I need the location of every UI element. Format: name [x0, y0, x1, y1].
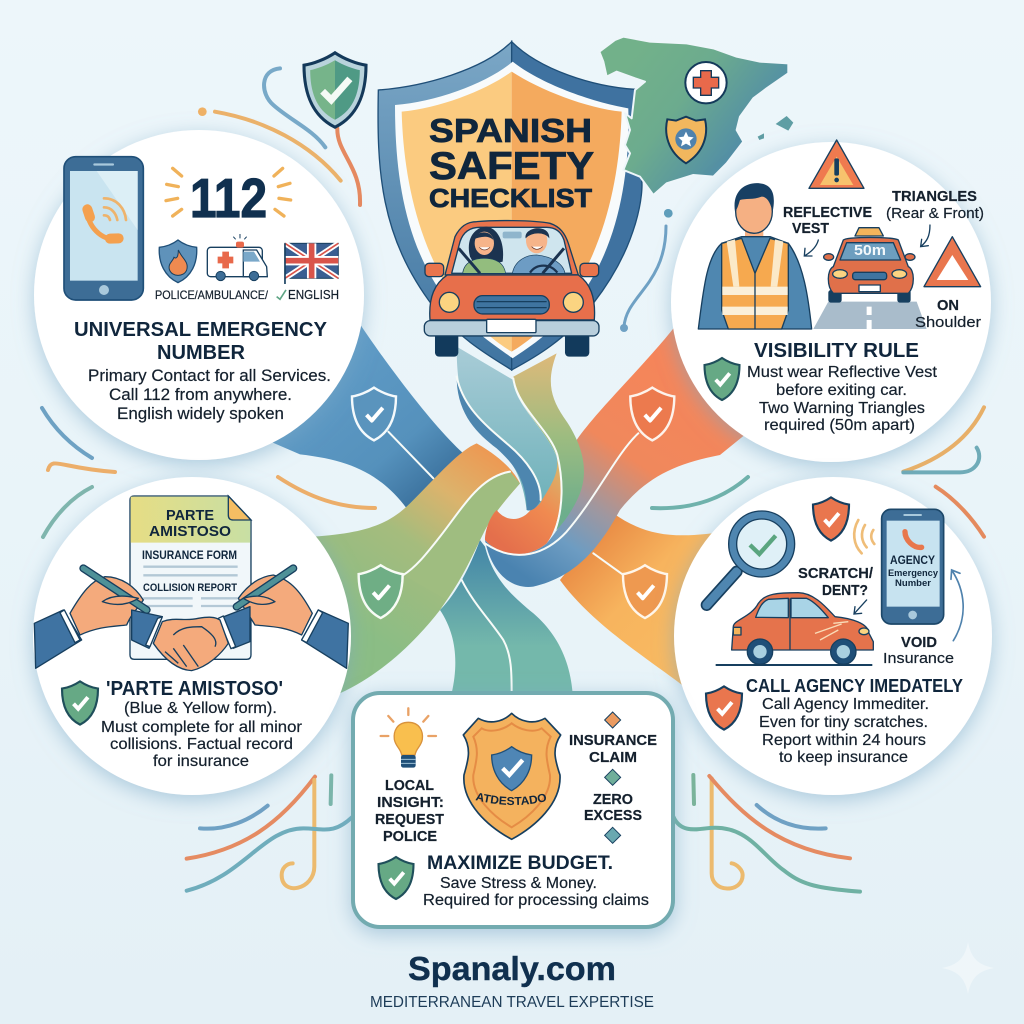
left arm — [34, 568, 147, 668]
body text: Save Stress & Money. — [440, 875, 597, 892]
body text: collisions. Factual record — [110, 736, 293, 753]
decorative swirl lines — [42, 68, 984, 892]
ribbon: green-gold from shield — [513, 353, 584, 532]
insight labels: LOCAL — [385, 778, 434, 794]
phone text: Emergency — [888, 568, 939, 579]
icon: floating green shield — [304, 53, 366, 127]
labels: SCRATCH/ — [798, 566, 873, 582]
icon: shield on orange ribbon — [630, 388, 674, 440]
central woven ribbons — [267, 317, 747, 693]
panel: maximize budget — [340, 684, 686, 944]
heading: UNIVERSAL EMERGENCY — [74, 319, 328, 341]
arrows — [804, 225, 930, 256]
heading: VISIBILITY RULE — [754, 340, 919, 362]
badge label: ATDESTADO — [476, 793, 546, 806]
body text: Call Agency Immediter. — [762, 696, 929, 713]
heading: NUMBER — [157, 342, 246, 364]
benefit labels: EXCESS — [584, 808, 642, 824]
body text — [88, 367, 331, 423]
body text: Must complete for all minor — [101, 719, 303, 736]
brand footer: MEDITERRANEAN TRAVEL EXPERTISE — [370, 994, 654, 1011]
ribbon: green to Parte Amistoso panel — [313, 443, 520, 693]
benefit labels: ZERO — [593, 792, 633, 808]
diamonds — [605, 712, 621, 843]
icon: signal waves — [854, 520, 874, 553]
title text — [429, 112, 594, 213]
icon: sparkle watermark — [942, 942, 994, 994]
labels: VEST — [792, 221, 829, 237]
ribbon: teal-blue from shield — [457, 347, 557, 511]
body text: before exiting car. — [776, 382, 907, 399]
brand footer — [370, 950, 654, 1011]
labels: VOID — [901, 634, 937, 651]
number 112: 112 — [190, 167, 267, 229]
benefit labels: INSURANCE — [569, 733, 657, 749]
body text — [423, 875, 649, 909]
phone text: AGENCY — [890, 555, 935, 567]
body text — [747, 364, 938, 434]
labels: (Rear & Front) — [886, 205, 984, 222]
phone text — [888, 555, 939, 589]
icon: shield on green ribbon — [359, 565, 403, 618]
benefit labels — [569, 733, 657, 824]
body text: Must wear Reflective Vest — [747, 364, 938, 381]
icon: light bulb — [381, 708, 436, 768]
body text: Required for processing claims — [423, 892, 649, 909]
icon: reflective triangle — [924, 237, 981, 287]
panel: universal emergency number — [34, 130, 364, 460]
heading: 'PARTE AMISTOSO' — [106, 678, 283, 700]
icon: car on road — [813, 228, 927, 329]
labels: Insurance — [883, 650, 954, 667]
icon: UK flag — [277, 243, 338, 299]
heading: MAXIMIZE BUDGET. — [427, 852, 613, 874]
icon: police badge — [666, 117, 706, 163]
body text: for insurance — [153, 753, 249, 770]
icon: scratched car — [716, 593, 873, 665]
labels: ON — [937, 297, 959, 314]
body text: to keep insurance — [779, 749, 908, 766]
insight labels — [375, 778, 444, 845]
body text: required (50m apart) — [764, 417, 915, 434]
map of Spain — [599, 37, 793, 218]
form labels: AMISTOSO — [149, 523, 231, 540]
body text — [101, 700, 303, 770]
icon: green shield — [62, 681, 98, 725]
service labels — [155, 288, 339, 302]
icon: insurance form document — [130, 496, 251, 659]
body text: (Blue & Yellow form). — [124, 700, 277, 717]
body text: Two Warning Triangles — [759, 400, 925, 417]
title text: SPANISH — [429, 112, 592, 149]
ribbon: blue to emergency panel — [267, 317, 463, 508]
icon: shield on blue ribbon — [352, 388, 396, 440]
form labels: INSURANCE FORM — [142, 550, 237, 562]
insight labels: INSIGHT: — [377, 795, 444, 811]
labels: DENT? — [822, 583, 868, 599]
ribbon: orange-blue band to visibility panel — [485, 320, 747, 587]
panel: visibility rule — [671, 140, 991, 462]
service labels: ENGLISH — [288, 288, 339, 302]
icon: magnifying glass — [707, 515, 791, 605]
labels: TRIANGLES — [892, 189, 977, 205]
body text: Even for tiny scratches. — [759, 714, 928, 731]
icon: orange shield — [813, 497, 849, 541]
icon: warning triangle — [809, 140, 864, 188]
right arm — [237, 568, 348, 668]
service labels: POLICE/AMBULANCE/ — [155, 288, 269, 302]
form labels: PARTE — [166, 507, 214, 524]
icon: atestado badge — [463, 713, 561, 839]
ribbon: orange swirl — [485, 457, 561, 554]
arrows — [854, 570, 963, 641]
icon: shield on lower orange ribbon — [623, 565, 667, 618]
shield emblem — [378, 42, 642, 370]
labels: REFLECTIVE — [783, 205, 872, 221]
icons: services — [159, 234, 267, 283]
body text: Call 112 from anywhere. — [109, 386, 292, 404]
panel: parte amistoso — [33, 477, 351, 795]
title text: CHECKLIST — [429, 183, 592, 213]
icon: green shield — [704, 358, 740, 400]
icon: green shield — [378, 857, 414, 899]
labels — [783, 189, 984, 331]
labels — [798, 566, 954, 667]
panel: call agency immediately — [674, 477, 992, 795]
ribbon: orange to Call Agency panel — [560, 513, 733, 690]
icon: phone calling — [64, 157, 143, 300]
insight labels: REQUEST — [375, 812, 444, 828]
icon: agency phone — [882, 509, 944, 624]
labels: Shoulder — [915, 314, 981, 331]
form labels: COLLISION REPORT — [143, 582, 237, 594]
title text: SAFETY — [429, 145, 594, 188]
shaking hands — [132, 607, 250, 671]
icon: orange shield small — [706, 686, 742, 730]
body text: English widely spoken — [117, 405, 284, 423]
benefit labels: CLAIM — [589, 750, 637, 766]
form labels — [142, 507, 237, 594]
phone text: Number — [895, 578, 931, 589]
car with driver and passenger — [424, 221, 599, 357]
central shield with title — [378, 42, 642, 370]
road distance label: 50m — [854, 242, 886, 259]
insight labels: POLICE — [383, 829, 437, 845]
body text: Primary Contact for all Services. — [88, 367, 331, 385]
body text: Report within 24 hours — [762, 732, 926, 749]
icon: person in reflective vest — [698, 183, 812, 329]
icon: red cross — [685, 62, 727, 103]
brand footer: Spanaly.com — [408, 950, 616, 987]
heading: CALL AGENCY IMEDATELY — [746, 675, 964, 696]
body text — [759, 696, 929, 766]
heading — [74, 319, 328, 364]
icon: handshake with pens — [34, 568, 348, 671]
ribbon: teal to budget panel — [440, 540, 573, 693]
